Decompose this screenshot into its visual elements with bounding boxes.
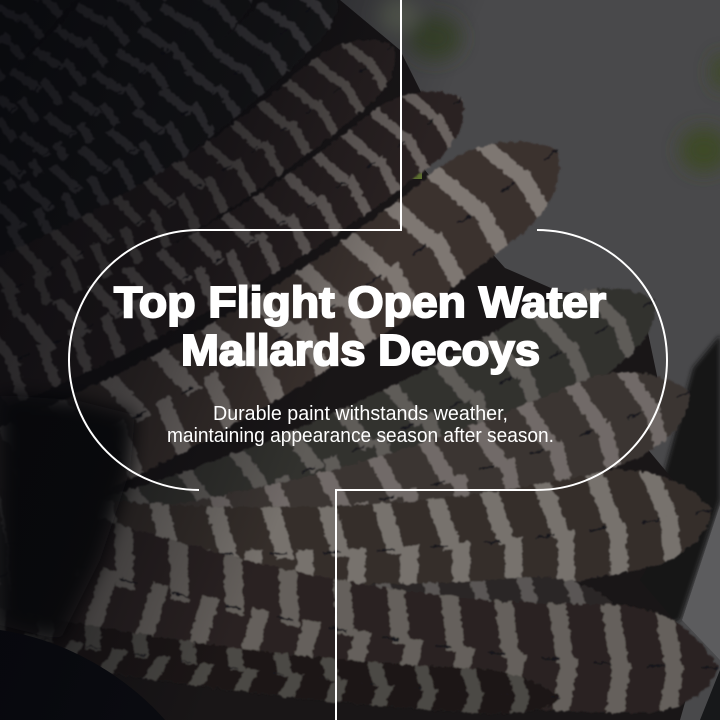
feather tip at 557,150 [0,20,592,649]
subtitle line 1: Durable paint withstands weather, [213,403,508,425]
title [114,278,606,375]
feather tip at 693,388 [0,257,714,708]
foliage pale highlight [378,0,418,33]
frame: top-left stroke from top edge around left side [69,0,401,490]
frame: bottom-right stroke from bottom edge around right side [336,230,667,720]
foliage top [409,16,461,60]
blue-black shadow mass lower left [0,395,135,640]
title line 2: Mallards Decoys [181,326,540,375]
dark shape at right edge [600,335,720,640]
feather tip at 462,95 [0,0,488,476]
upper-left dark feathers [0,0,360,348]
feather tip at 712,505 [0,354,720,693]
title line 1: Top Flight Open Water [114,278,606,327]
foliage mid-right [680,128,720,172]
bottom edge feather [0,597,571,717]
subtitle line 2: maintaining appearance season after season. [167,425,554,447]
subtitle [167,403,554,447]
green sliver behind feathers [372,167,422,179]
bottom right dark corner [700,670,720,720]
lower right pale backdrop [682,505,720,660]
black wing base bottom left [0,630,165,720]
large feather bottom right [0,490,720,715]
green foliage blurs [378,0,720,172]
low middle feather [0,505,630,684]
feather tip at 662,292 [0,172,683,711]
feather tip at 395,45 [0,0,417,400]
foliage top-right [712,54,720,90]
